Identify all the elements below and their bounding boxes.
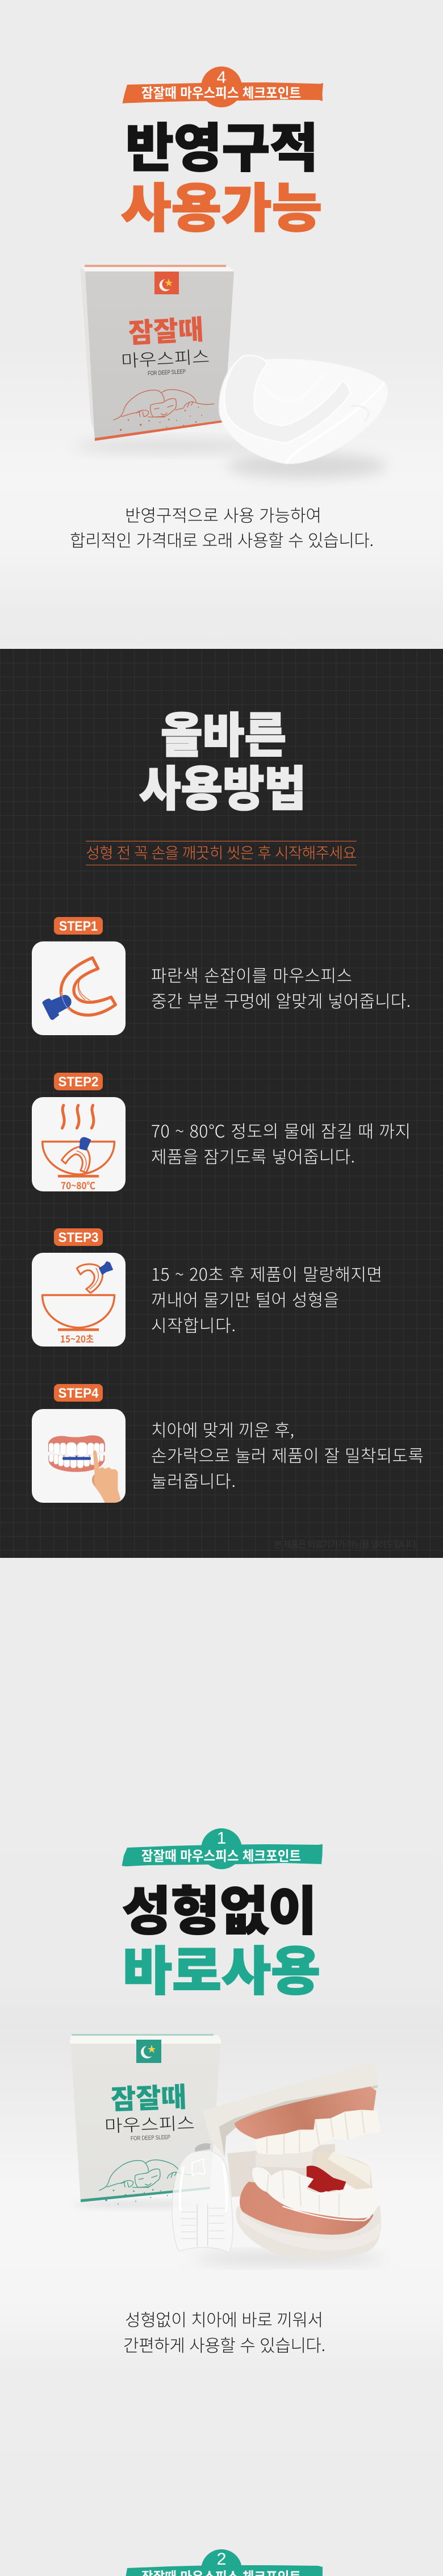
step text: 70 ~ 80℃ 정도의 물에 잠길 때 까지 xyxy=(151,1118,411,1143)
step 3 xyxy=(32,1228,382,1347)
mouthpiece xyxy=(219,356,388,464)
step 1 xyxy=(32,917,411,1035)
badge: checkpoint 4 xyxy=(123,66,323,107)
upper base xyxy=(202,2064,378,2157)
panel: usage guide xyxy=(0,648,443,1558)
step 2 xyxy=(32,1073,411,1192)
badge: checkpoint 1: 1 xyxy=(217,1829,226,1848)
step text: 제품을 잠기도록 넣어줍니다. xyxy=(151,1143,355,1168)
step text: 꺼내어 물기만 털어 성형을 xyxy=(151,1286,339,1311)
step text: 파란색 손잡이를 마우스피스 xyxy=(151,962,352,987)
badge: checkpoint 4: 잠잘때 마우스피스 체크포인트 xyxy=(141,82,301,102)
disclaimer: 본 제품은 의료기기가 아님을 알려드립니다. xyxy=(274,1537,418,1550)
box: 잠잘때 xyxy=(110,2075,187,2117)
description text xyxy=(123,2306,325,2357)
box: FOR DEEP SLEEP xyxy=(131,2134,170,2142)
photo: product box, mouthpiece and dental model xyxy=(70,2034,383,2264)
description text xyxy=(70,502,374,552)
step badge: STEP3 xyxy=(58,1230,99,1245)
title: 성형없이: 성형없이 xyxy=(122,1869,317,1945)
title: 올바른: 올바른 xyxy=(161,698,286,766)
box: FOR DEEP SLEEP xyxy=(148,368,186,377)
panel: checkpoint 4 xyxy=(70,66,388,552)
panel: checkpoint 1 xyxy=(70,1828,383,2357)
title: 사용가능: 사용가능 xyxy=(121,166,322,242)
box illustration: sleeping character xyxy=(99,2160,197,2204)
box illustration: sleeping character xyxy=(114,389,214,434)
back lower teeth xyxy=(316,2152,373,2193)
box label xyxy=(136,2040,161,2063)
step text: 치아에 맞게 끼운 후, xyxy=(151,1416,294,1441)
step card with teeth and finger icon xyxy=(32,1409,126,1504)
box: 마우스피스 xyxy=(120,343,210,372)
step text: 손가락으로 눌러 제품이 잘 밀착되도록 xyxy=(151,1442,424,1467)
step badge: STEP4 xyxy=(58,1386,99,1401)
title: 반영구적: 반영구적 xyxy=(126,106,318,182)
step card with mouthpiece icon xyxy=(32,941,126,1035)
title: 사용방법: 사용방법 xyxy=(139,751,306,820)
tongue xyxy=(307,2166,346,2192)
description text: 합리적인 가격대로 오래 사용할 수 있습니다. xyxy=(70,527,374,552)
step 4 xyxy=(32,1384,424,1504)
lower base xyxy=(236,2206,381,2259)
box: 잠잘때 xyxy=(127,307,204,351)
badge: checkpoint 2 xyxy=(123,2549,323,2576)
upper gum xyxy=(235,2087,377,2139)
box xyxy=(80,265,234,441)
step text xyxy=(151,1416,424,1493)
clear mouthpiece xyxy=(172,2143,233,2253)
step text: 눌러줍니다. xyxy=(151,1468,236,1493)
step text xyxy=(151,1118,411,1168)
description text: 반영구적으로 사용 가능하여 xyxy=(125,502,321,527)
box label xyxy=(154,272,179,294)
dark grid background xyxy=(0,648,443,1558)
upper teeth xyxy=(254,2110,381,2154)
badge: checkpoint 2: 2 xyxy=(217,2550,226,2569)
notice: wash hands: 성형 전 꼭 손을 깨끗히 씻은 후 시작해주세요 xyxy=(86,841,357,863)
title: 바로사용: 바로사용 xyxy=(123,1929,320,2005)
step card with lifted mouthpiece icon: 15~20초 xyxy=(60,1331,94,1345)
step card with lifted mouthpiece icon xyxy=(32,1253,126,1347)
badge: checkpoint 4: 4 xyxy=(217,68,226,87)
shadows xyxy=(196,2253,383,2264)
step card with hot water bowl icon xyxy=(32,1097,126,1192)
lower teeth and guard xyxy=(252,2167,381,2219)
description text: 성형없이 치아에 바로 끼워서 xyxy=(125,2306,323,2331)
description text: 간편하게 사용할 수 있습니다. xyxy=(123,2332,325,2357)
step badge: STEP1 xyxy=(59,919,98,934)
step text: 시작합니다. xyxy=(151,1312,236,1337)
panel: checkpoint 2 (cut off) xyxy=(123,2549,323,2576)
step card with hot water bowl icon: 70~80℃ xyxy=(61,1178,95,1192)
box: 마우스피스 xyxy=(104,2109,195,2137)
step badge: STEP2 xyxy=(58,1074,99,1090)
hinge post xyxy=(227,2144,336,2197)
dental model xyxy=(202,2064,381,2259)
badge: checkpoint 1: 잠잘때 마우스피스 체크포인트 xyxy=(141,1845,301,1865)
step text: 중간 부분 구멍에 알맞게 넣어줍니다. xyxy=(151,987,411,1012)
lower gum xyxy=(240,2182,373,2235)
step text xyxy=(151,1261,382,1337)
step text: 15 ~ 20초 후 제품이 말랑해지면 xyxy=(151,1261,382,1286)
photo: product box and mouthpiece xyxy=(74,265,388,478)
step text xyxy=(151,962,411,1012)
badge: checkpoint 1 xyxy=(122,1828,323,1869)
box xyxy=(70,2034,221,2204)
shadows xyxy=(74,439,267,453)
